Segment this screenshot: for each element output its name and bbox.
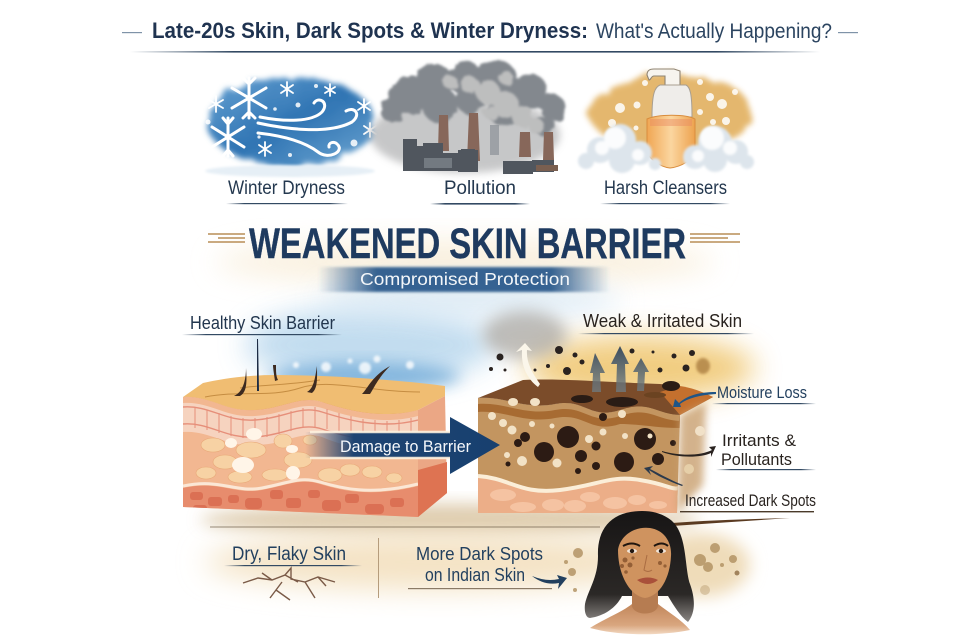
label: weak and irritated skin: Weak & Irritated Skin <box>583 311 742 331</box>
callout: irritants and pollutants: Pollutants <box>721 450 792 469</box>
panel: winter dryness <box>205 77 376 204</box>
icon: smoke and factory <box>370 60 566 174</box>
callout: increased dark spots: Increased Dark Spots <box>685 491 816 510</box>
banner: compromised protection <box>318 267 610 292</box>
label: healthy skin barrier: Healthy Skin Barrier <box>190 313 335 333</box>
label: more dark spots on indian skin: More Dark Spots <box>416 543 543 564</box>
arrow to portrait <box>532 575 567 589</box>
icon: skin crack <box>243 568 335 600</box>
arrow: damage to barrier: Damage to Barrier <box>340 437 471 456</box>
label: more dark spots on indian skin: on Indian Skin <box>425 565 525 585</box>
icon: pump bottle in foam <box>578 69 754 173</box>
background wash <box>200 240 755 597</box>
divider <box>378 538 379 598</box>
label: dry flaky skin <box>224 544 362 600</box>
callout: moisture loss <box>673 383 816 407</box>
icon: snow and wind <box>205 77 376 177</box>
title <box>122 18 858 53</box>
callout: moisture loss: Moisture Loss <box>717 383 807 402</box>
icon: escaping moisture arrows <box>516 343 649 392</box>
panel: pollution <box>370 60 566 205</box>
label: winter dryness: Winter Dryness <box>228 178 345 199</box>
title: What's Actually Happening? <box>596 20 832 43</box>
right side face <box>677 402 706 513</box>
label: dry flaky skin: Dry, Flaky Skin <box>232 544 346 565</box>
banner: compromised protection: Compromised Protection <box>360 269 570 289</box>
arrow: damage to barrier <box>305 417 500 474</box>
panel: harsh cleansers <box>578 69 754 204</box>
top surface with hairs <box>183 339 445 421</box>
right side face <box>418 396 447 517</box>
ground line <box>210 526 600 528</box>
diagram: damaged skin block <box>478 343 713 520</box>
title: Late-20s Skin, Dark Spots & Winter Dryness: <box>152 18 588 43</box>
portrait: woman with dark spots <box>564 511 740 634</box>
label: harsh cleansers: Harsh Cleansers <box>604 178 727 199</box>
label: pollution <box>430 178 530 205</box>
diagram: healthy skin block <box>183 339 447 520</box>
callout: irritants and pollutants: Irritants & <box>722 431 797 450</box>
callout: irritants and pollutants <box>662 431 816 470</box>
pollutant specks <box>489 346 695 375</box>
cell layer with dark spots <box>478 395 683 520</box>
callout: increased dark spots <box>644 466 816 526</box>
top surface <box>478 379 713 415</box>
label: more dark spots on indian skin <box>408 543 567 589</box>
skin layers <box>183 395 418 520</box>
watercolor spots <box>564 543 740 595</box>
heading: weakened skin barrier: WEAKENED SKIN BARRIER <box>249 220 686 268</box>
label: pollution: Pollution <box>444 178 516 199</box>
